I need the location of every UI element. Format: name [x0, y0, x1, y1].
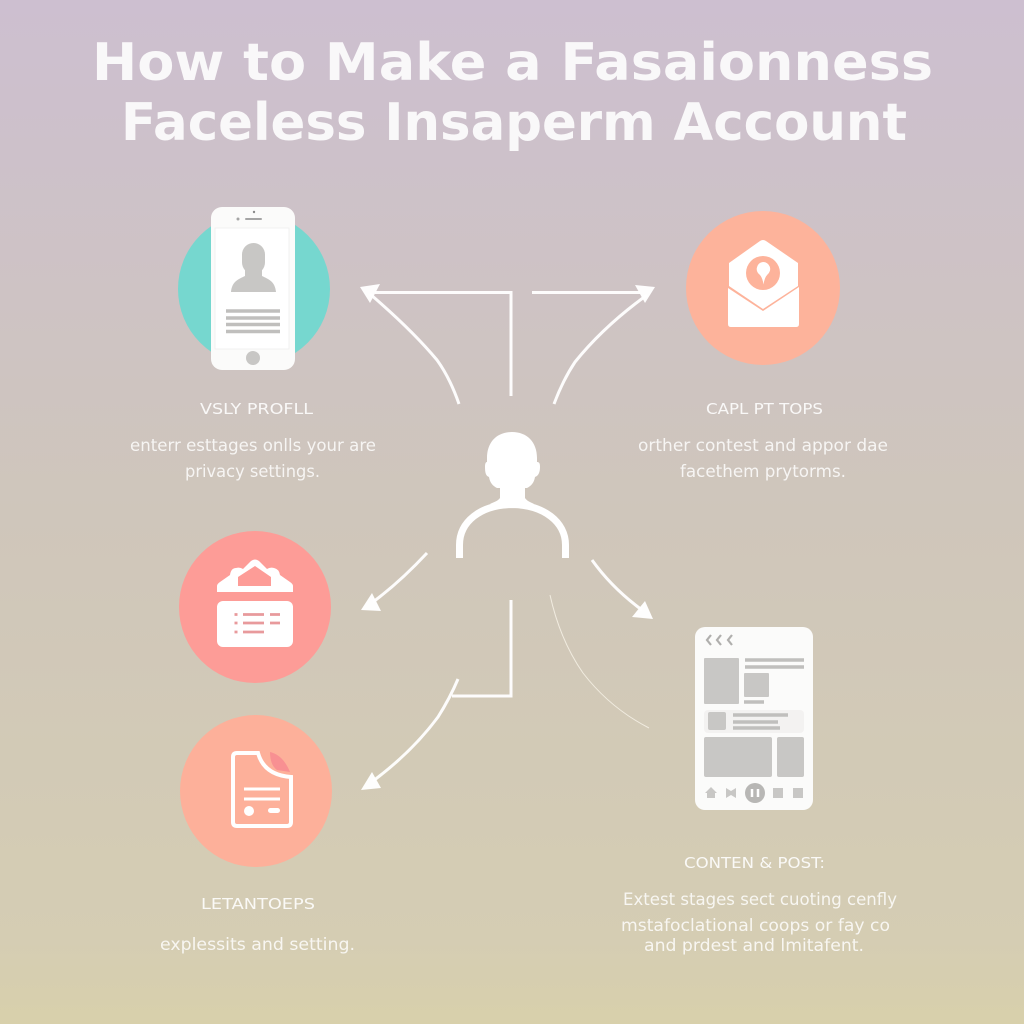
panel: content and post step	[621, 627, 897, 956]
panel: calendar step	[179, 531, 331, 683]
icon: calendar on coral circle	[179, 531, 331, 683]
arrow: down-right to card	[592, 560, 653, 619]
text: content and post description: and prdest and lmitafent.	[644, 936, 864, 956]
text: profile description: privacy settings.	[185, 462, 320, 482]
arrow: up-left curve	[370, 294, 459, 404]
arrow: lower elbow connector	[452, 600, 511, 696]
icon: phone profile on teal circle	[178, 207, 330, 370]
heading: profile: VSLY PROFLL	[200, 400, 314, 418]
icon: document on peach circle	[180, 715, 332, 867]
arrow: up-right elbow	[532, 285, 655, 303]
panel: topics step	[638, 211, 888, 482]
text: topics description	[638, 436, 888, 482]
panel: letter step	[160, 715, 355, 955]
icon: app screen card	[695, 627, 813, 810]
text: topics description: orther contest and appor dae	[638, 436, 888, 456]
arrow: thin curve to card	[550, 595, 649, 728]
icon: envelope on peach circle	[686, 211, 840, 365]
arrow: up-right curve	[554, 295, 647, 404]
title: Faceless Insaperm Account	[121, 93, 907, 153]
title: How to Make a Fasaionness	[92, 33, 933, 93]
panel: profile step	[130, 207, 376, 482]
text: content and post description	[621, 890, 897, 956]
heading: letter step: LETANTOEPS	[201, 895, 315, 913]
text: profile description	[130, 436, 376, 482]
text: content and post description: Extest stages sect cuoting cenfly	[623, 890, 897, 910]
arrow: up-left elbow	[360, 284, 511, 396]
text: profile description: enterr esttages onlls your are	[130, 436, 376, 456]
title	[92, 33, 933, 153]
arrow: down-left to calendar	[361, 553, 427, 611]
heading: content and post: CONTEN & POST:	[684, 854, 825, 872]
text: content and post description: mstafoclational coops or fay co	[621, 916, 890, 936]
text: letter step description: explessits and setting.	[160, 935, 355, 955]
arrow: down-left to document	[361, 679, 458, 790]
icon: central faceless person	[460, 432, 566, 558]
text: topics description: facethem prytorms.	[680, 462, 846, 482]
heading: topics: CAPL PT TOPS	[706, 400, 823, 418]
